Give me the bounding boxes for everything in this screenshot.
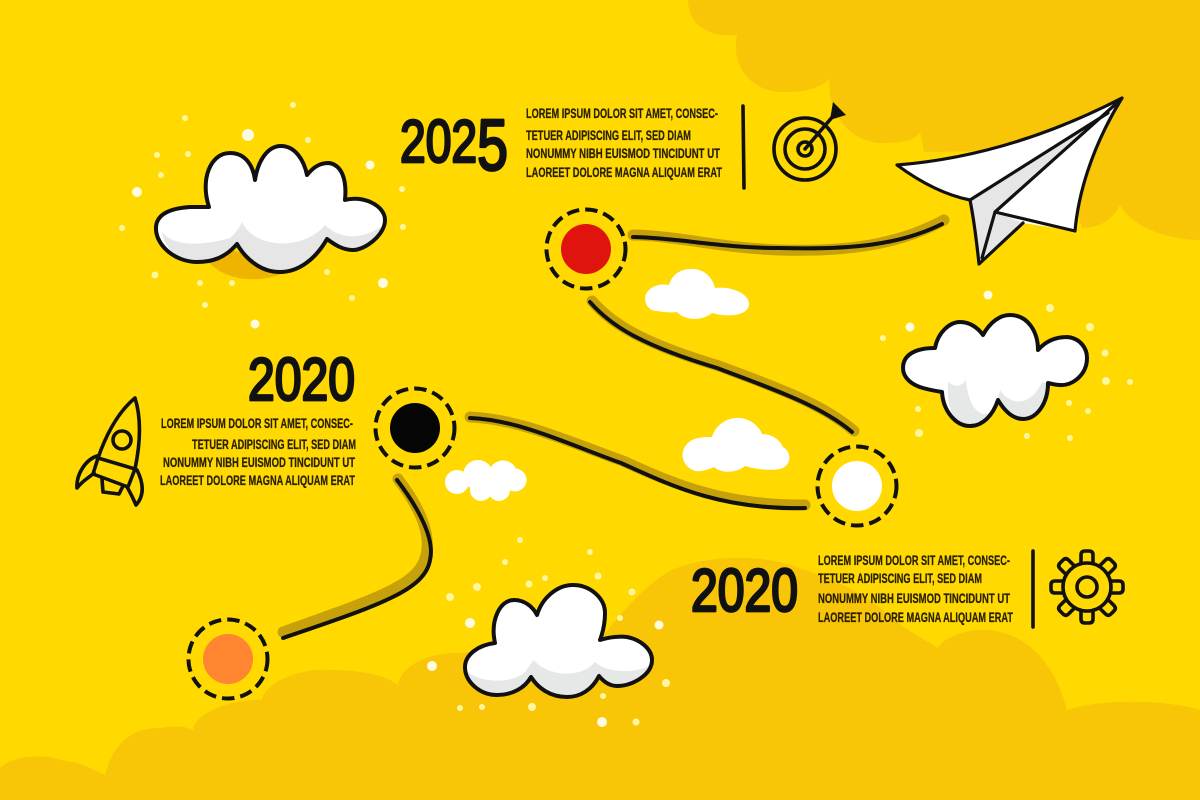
node: black <box>376 388 454 468</box>
text block: 2020 right: LOREM IPSUM DOLOR SIT AMET, CONSEC- <box>818 553 1010 568</box>
text block: 2020 left: LAOREET DOLORE MAGNA ALIQUAM ERAT <box>160 473 356 488</box>
text block: 2020 left: LOREM IPSUM DOLOR SIT AMET, CONSEC- <box>161 416 353 431</box>
divider: 2020 right <box>1031 551 1035 627</box>
node: red <box>546 210 626 288</box>
paper plane <box>897 98 1122 264</box>
icon: rocket <box>77 398 142 505</box>
text block: 2020 right: LAOREET DOLORE MAGNA ALIQUAM ERAT <box>818 610 1014 625</box>
cloud: bottom center <box>465 585 652 697</box>
route: red to white <box>590 301 854 432</box>
text block: 2020 right: TETUER ADIPISCING ELIT, SED DIAM <box>818 571 982 586</box>
icon: target <box>774 102 846 180</box>
text block: 2025: LAOREET DOLORE MAGNA ALIQUAM ERAT <box>526 165 723 180</box>
divider: 2025 <box>743 106 744 188</box>
text block: 2020 left: TETUER ADIPISCING ELIT, SED DIAM <box>192 437 356 452</box>
text block: 2025: LOREM IPSUM DOLOR SIT AMET, CONSEC- <box>526 106 718 121</box>
text block: 2020 right: NONUMMY NIBH EUISMOD TINCIDUNT UT <box>818 591 1011 606</box>
year: 2025: 5 <box>477 106 508 186</box>
route: black to white <box>470 417 805 508</box>
decorative dots <box>119 102 1133 727</box>
node: white <box>818 446 896 526</box>
text block: 2020 left: NONUMMY NIBH EUISMOD TINCIDUNT UT <box>163 455 356 470</box>
text block: 2025: TETUER ADIPISCING ELIT, SED DIAM <box>526 128 691 143</box>
cloud: right <box>903 315 1087 426</box>
text block: 2020 right <box>818 553 1014 625</box>
icon: gear <box>1051 551 1123 623</box>
route: red to plane <box>633 220 944 250</box>
year: 2020 right: 2020 <box>691 557 798 624</box>
text block: 2020 left <box>160 416 356 488</box>
small white cloud: middle <box>683 418 789 472</box>
text block: 2025: NONUMMY NIBH EUISMOD TINCIDUNT UT <box>526 146 721 161</box>
background cloud: top right <box>688 0 1200 240</box>
year: 2020 left: 2020 <box>248 346 355 413</box>
route: black to orange <box>283 479 431 638</box>
year: 2025: 202 <box>400 108 500 175</box>
cloud: top left <box>156 146 385 279</box>
background cloud: bottom <box>0 558 1200 800</box>
text block: 2025 <box>526 106 723 180</box>
small white cloud: lower <box>445 460 526 501</box>
node: orange <box>188 620 268 698</box>
small white cloud: upper <box>645 269 749 319</box>
